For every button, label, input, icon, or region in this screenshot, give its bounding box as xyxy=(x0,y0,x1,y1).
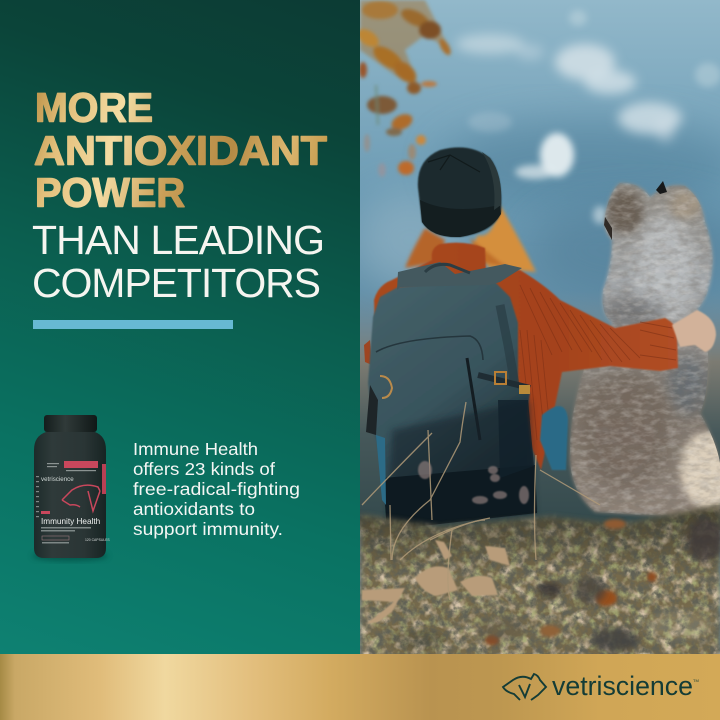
accent bar xyxy=(33,320,233,329)
product bottle xyxy=(32,415,110,563)
logo wordmark: vetriscience xyxy=(552,671,693,701)
brand logo xyxy=(502,671,699,701)
product description: support immunity. xyxy=(133,519,283,539)
label: brand: vetriscience xyxy=(41,476,74,483)
product bottle: 120 CAPSULES xyxy=(85,538,110,542)
heading: gold lines: ANTIOXIDANT xyxy=(34,128,327,174)
heading: gold lines: MORE xyxy=(35,84,153,130)
gold footer band xyxy=(0,654,720,720)
woman's hair xyxy=(405,205,536,272)
label: side text xyxy=(36,476,39,517)
sweater xyxy=(364,243,678,470)
bottle body xyxy=(34,432,106,558)
product description: free-radical-fighting xyxy=(133,479,300,499)
panel: green background xyxy=(0,0,360,654)
label: pink tag xyxy=(64,461,98,468)
heading: white lines: THAN LEADING xyxy=(32,217,325,263)
dog ear tip xyxy=(656,181,667,194)
autumn branch xyxy=(354,0,453,177)
dog xyxy=(565,180,720,516)
foreground seed heads xyxy=(418,461,529,504)
label: dog icon xyxy=(62,485,100,511)
product description: Immune Health xyxy=(133,439,258,459)
product description xyxy=(133,439,300,539)
product description: offers 23 kinds of xyxy=(133,459,275,479)
heading: white lines: COMPETITORS xyxy=(32,260,321,306)
heading: gold lines: POWER xyxy=(35,170,185,216)
ground with grass and leaves xyxy=(360,502,720,654)
sky with clouds xyxy=(355,0,720,654)
logo icon xyxy=(503,674,546,700)
hand on dog xyxy=(672,310,716,352)
bottle cap xyxy=(44,415,97,432)
label: product name: Immunity Health xyxy=(41,517,101,526)
heading xyxy=(32,84,328,306)
backpack xyxy=(366,262,568,530)
trademark: TM xyxy=(693,678,699,683)
foreground dry stalks xyxy=(362,402,600,600)
heading: gold lines xyxy=(34,84,327,216)
photo: woman and dog on hillside xyxy=(360,0,720,654)
hat xyxy=(418,147,501,237)
heading: white lines xyxy=(32,217,325,306)
product description: antioxidants to xyxy=(133,499,255,519)
